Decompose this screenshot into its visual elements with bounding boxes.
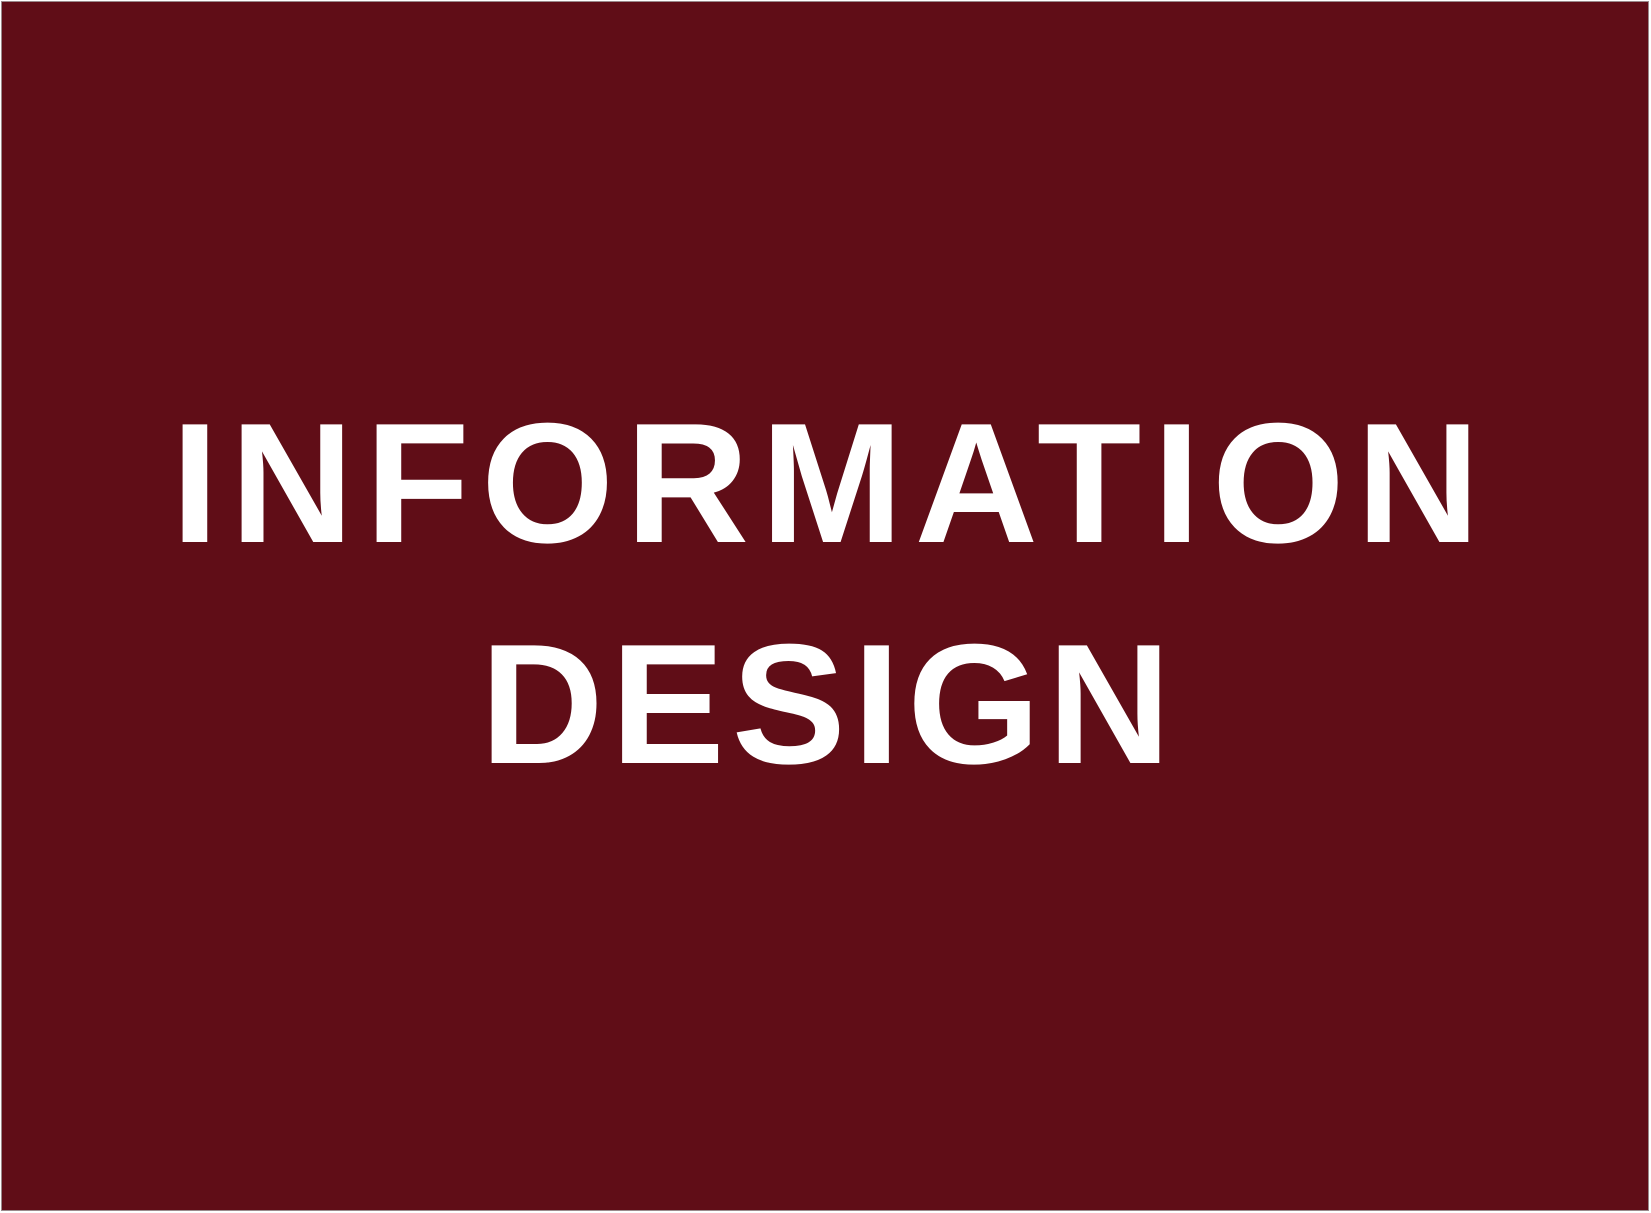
title: information design — [171, 388, 1491, 800]
title line 2: DESIGN — [480, 609, 1178, 800]
title line 1: INFORMATION — [171, 388, 1491, 579]
